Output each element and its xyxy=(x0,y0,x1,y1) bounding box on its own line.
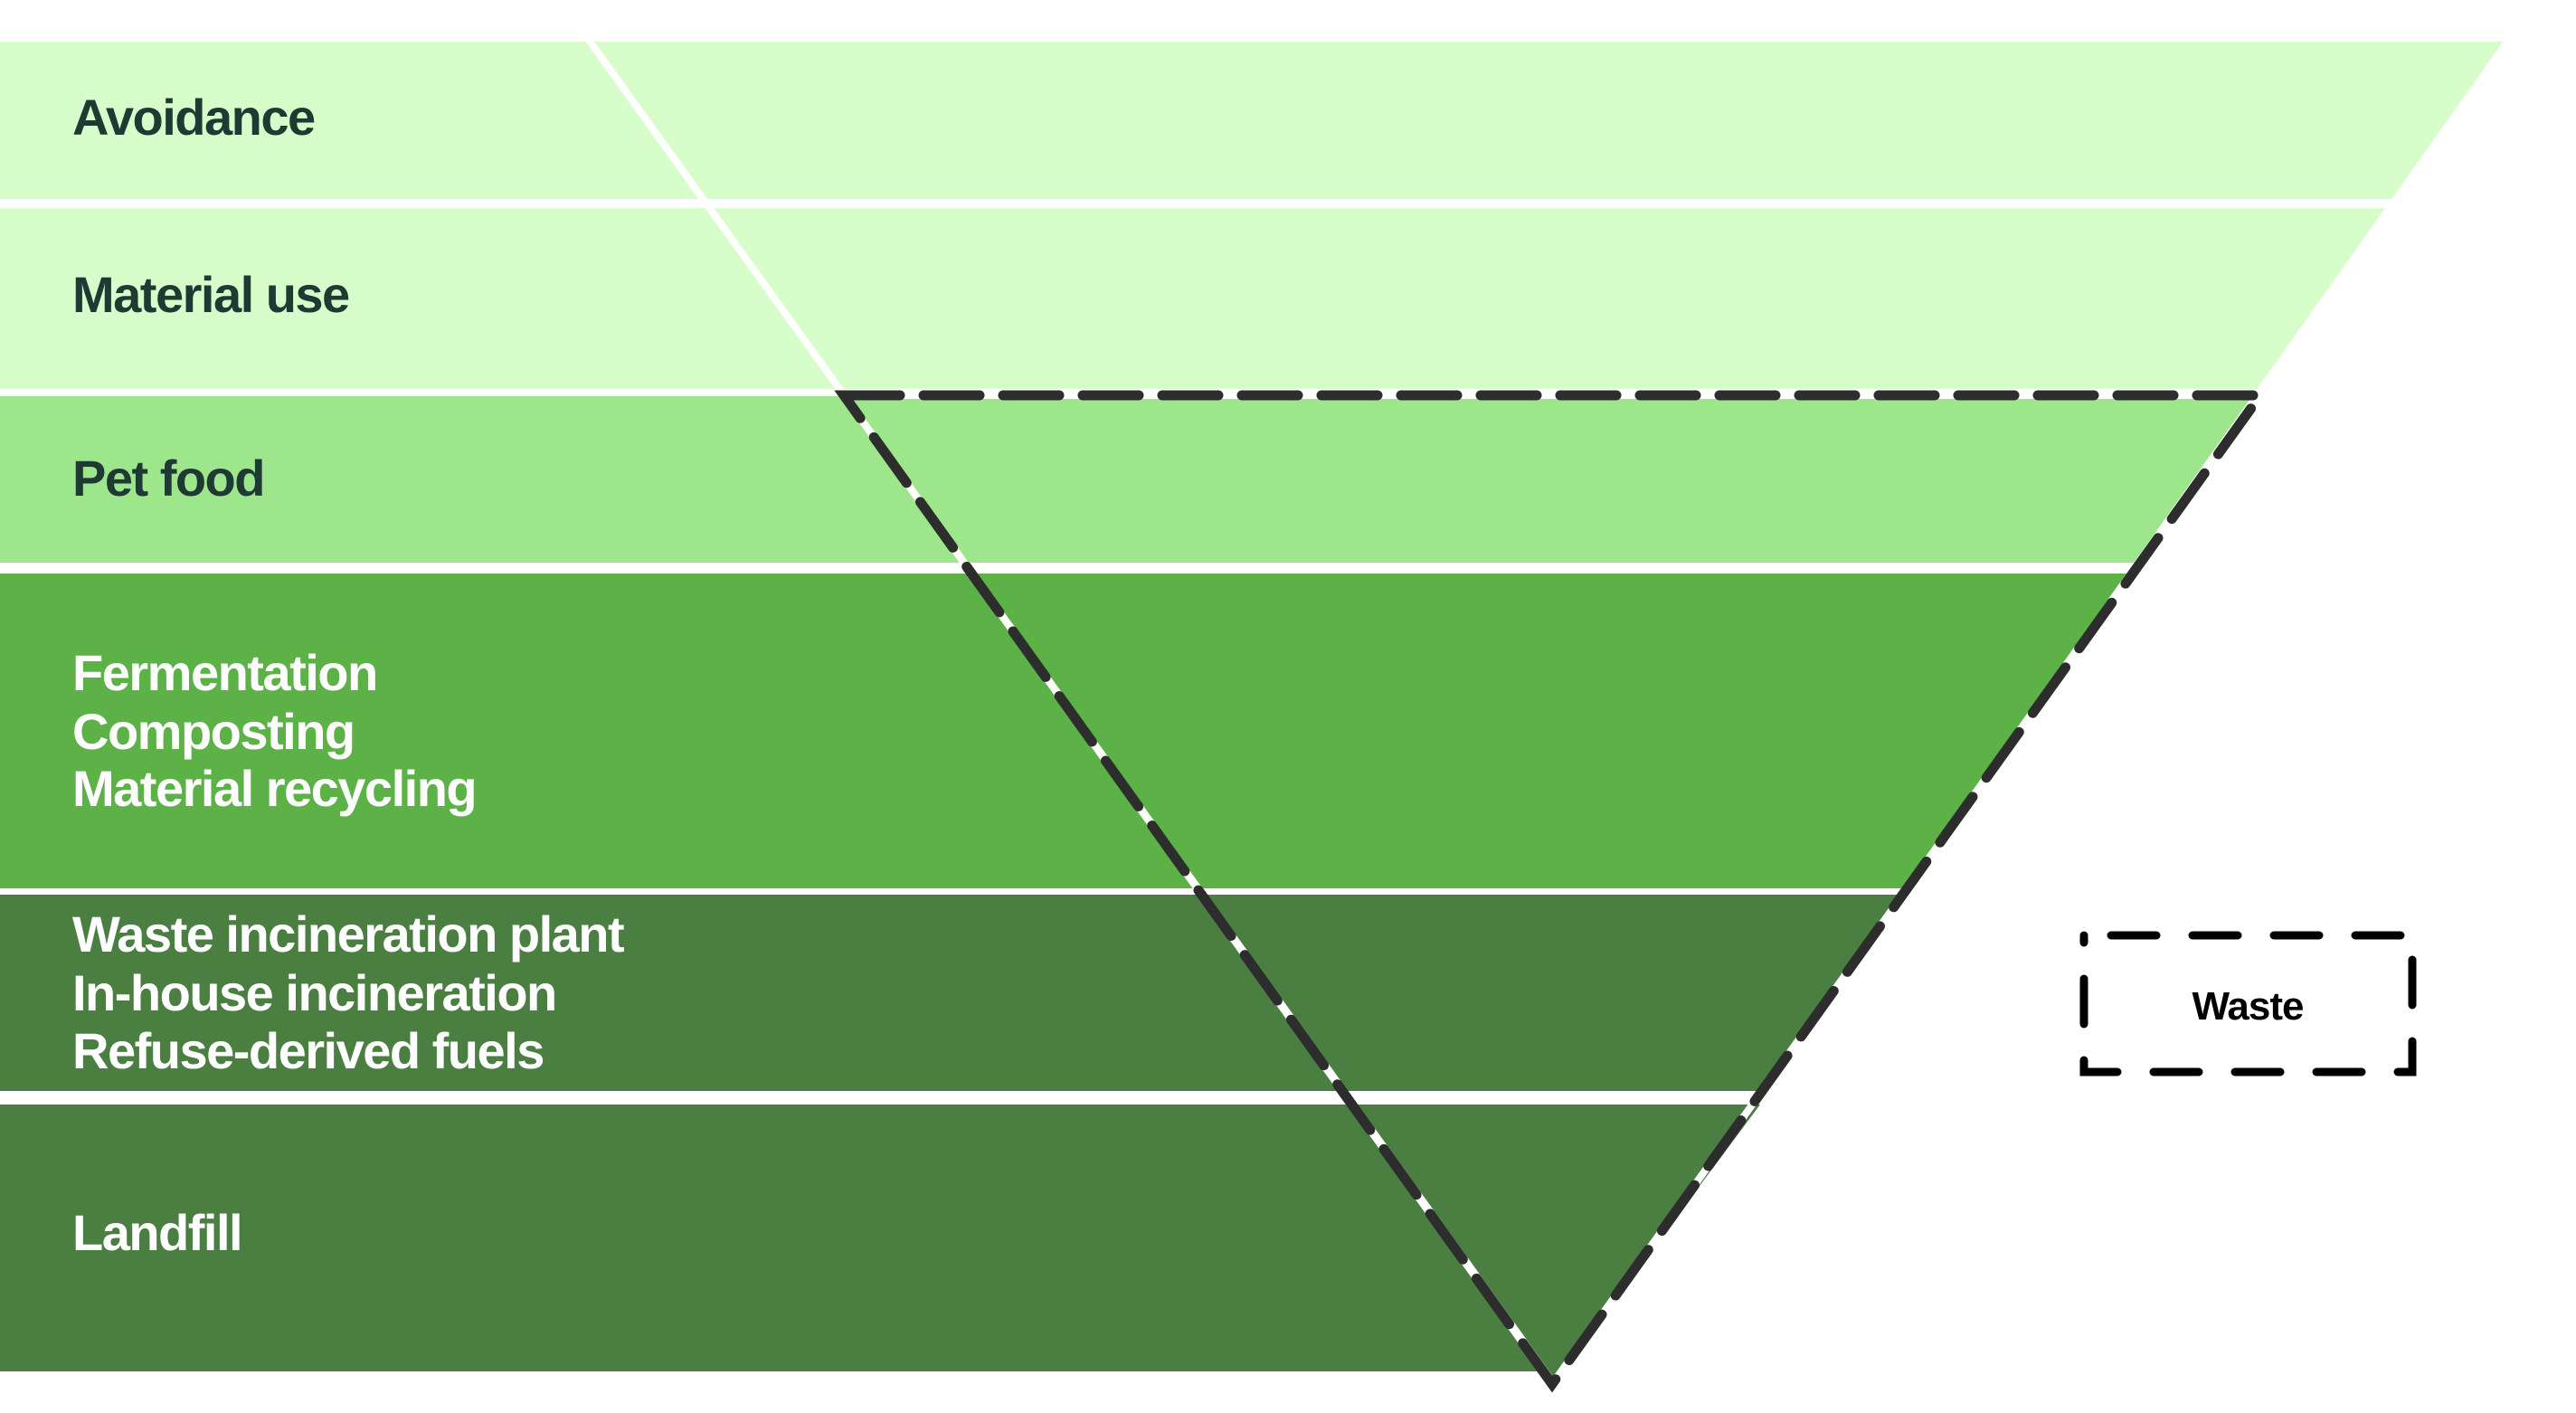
label: material use: Material use xyxy=(72,266,349,323)
legend: waste: Waste xyxy=(2192,984,2303,1029)
label: incineration group: Refuse-derived fuels xyxy=(72,1022,544,1079)
band: avoidance xyxy=(0,42,2576,199)
band: fermentation xyxy=(0,574,2126,888)
label: pet food: Pet food xyxy=(72,450,264,507)
label: fermentation group: Material recycling xyxy=(72,760,476,817)
label: fermentation group: Fermentation xyxy=(72,644,377,701)
label: fermentation group xyxy=(72,644,476,817)
label: incineration group xyxy=(72,906,624,1079)
waste triangle (dashed) xyxy=(844,395,2260,1384)
band: pet food xyxy=(0,396,2249,563)
white diagonal divider xyxy=(586,36,1552,1381)
band: material use xyxy=(0,208,2576,389)
label: avoidance: Avoidance xyxy=(72,89,315,146)
label: landfill: Landfill xyxy=(72,1204,242,1261)
legend: waste xyxy=(2084,935,2412,1072)
landfill tip xyxy=(1357,1105,1760,1384)
label: incineration group: Waste incineration plant xyxy=(72,906,624,963)
label: fermentation group: Composting xyxy=(72,703,355,760)
label: incineration group: In-house incineration xyxy=(72,964,556,1021)
band: incineration xyxy=(0,895,1897,1091)
band: landfill xyxy=(0,1105,1538,1371)
